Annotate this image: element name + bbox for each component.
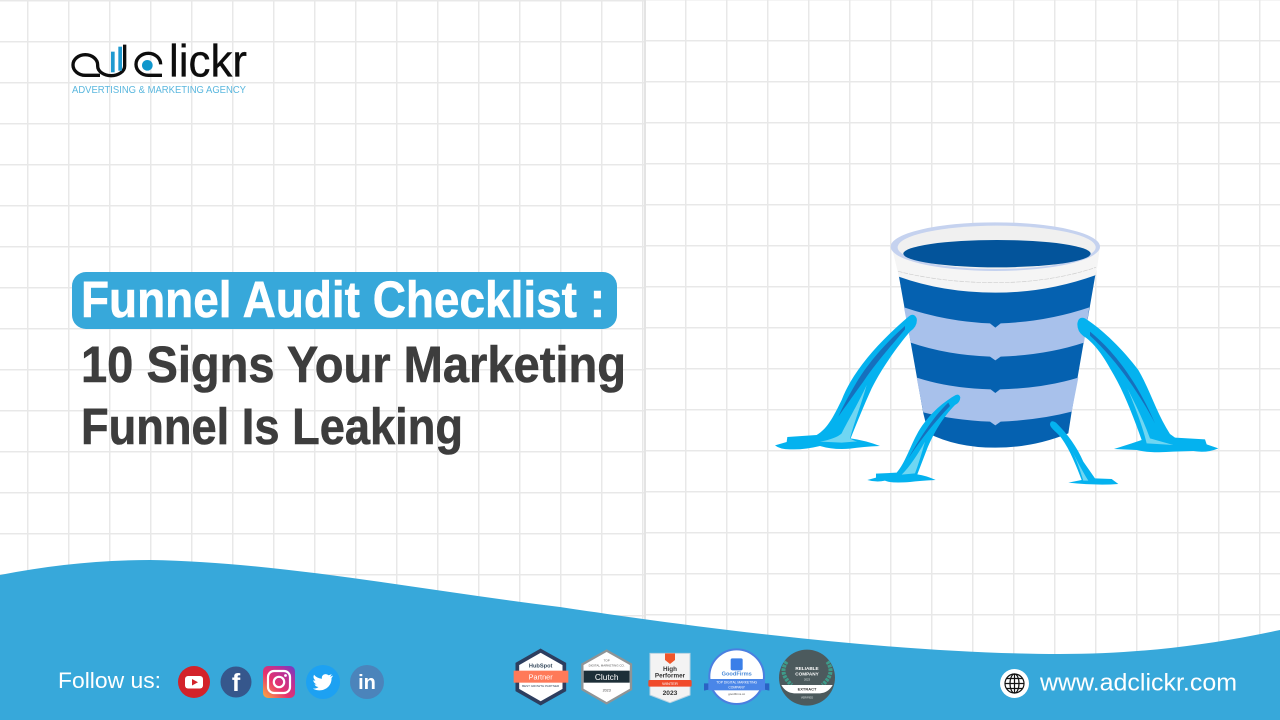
badge: reliable company: [779, 650, 835, 706]
badge: g2 high performer: WINTER: [662, 681, 678, 686]
title line 1: Funnel Audit Checklist :: [81, 271, 605, 328]
badge: reliable company: EXTRACT: [798, 686, 817, 691]
icon: linkedin: in: [358, 672, 376, 694]
badge: clutch: DIGITAL MARKETING CO.: [589, 664, 625, 668]
logo tagline: ADVERTISING & MARKETING AGENCY: [72, 85, 246, 96]
badge: hubspot partner: BEST GROWTH PARTNER: [522, 684, 560, 688]
icon: instagram: [263, 666, 295, 698]
light band lower: [917, 378, 1078, 425]
badge: goodfirms: GoodFirms: [722, 672, 752, 678]
light band upper: [904, 307, 1089, 360]
badge: g2 high performer: High: [663, 666, 677, 673]
badge: clutch: 2023: [603, 688, 611, 692]
bucket rim: [891, 222, 1100, 271]
follow us label: Follow us:: [58, 668, 161, 693]
illustration: leaking bucket: [775, 222, 1218, 485]
badge: hubspot partner: Partner: [529, 672, 553, 681]
icon: globe: [1000, 669, 1029, 698]
title block: [72, 271, 626, 455]
badge: reliable company: RELIABLE: [795, 666, 819, 671]
badge: clutch: [582, 651, 631, 703]
stream: left large: [775, 315, 917, 449]
badge: reliable company: COMPANY: [795, 672, 820, 677]
badge: clutch: Clutch: [595, 672, 619, 682]
badge: goodfirms: goodfirms.co: [728, 692, 746, 696]
title highlight pill: [72, 272, 617, 329]
bucket body: [899, 275, 1095, 448]
icon: linkedin: [350, 665, 384, 699]
icon: facebook: f: [232, 669, 241, 697]
icon: youtube: [178, 666, 210, 698]
title line 2: 10 Signs Your Marketing: [81, 336, 626, 393]
stream: lower left: [867, 395, 960, 482]
website url: www.adclickr.com: [1039, 670, 1237, 696]
badge: hubspot partner: HubSpot: [529, 663, 553, 669]
water surface: [903, 240, 1091, 267]
stream: lower right: [1050, 421, 1118, 485]
badge: g2 high performer: [648, 653, 692, 703]
badge: goodfirms: [704, 649, 769, 704]
logo: adclickr: [72, 36, 247, 96]
badge: g2 high performer: 2023: [663, 690, 678, 697]
icon: twitter: [306, 665, 340, 699]
award badges: [514, 649, 835, 706]
badge: g2 high performer: Performer: [655, 673, 686, 680]
icon: facebook: [220, 666, 252, 698]
badge: clutch: TOP: [604, 658, 610, 662]
stream: right large: [1077, 318, 1218, 452]
title line 3: Funnel Is Leaking: [81, 398, 463, 455]
bucket white band: [892, 247, 1100, 293]
footer wave: [0, 560, 1280, 720]
badge: reliable company: VERIFIED: [801, 696, 813, 700]
badge: goodfirms: TOP DIGITAL MARKETING: [716, 681, 758, 685]
social icons: [178, 665, 384, 699]
badge: reliable company: 2023: [804, 678, 810, 682]
badge: hubspot partner: [514, 651, 568, 703]
badge: goodfirms: COMPANY: [728, 685, 746, 689]
logo: adclickr: lickr: [169, 36, 247, 86]
